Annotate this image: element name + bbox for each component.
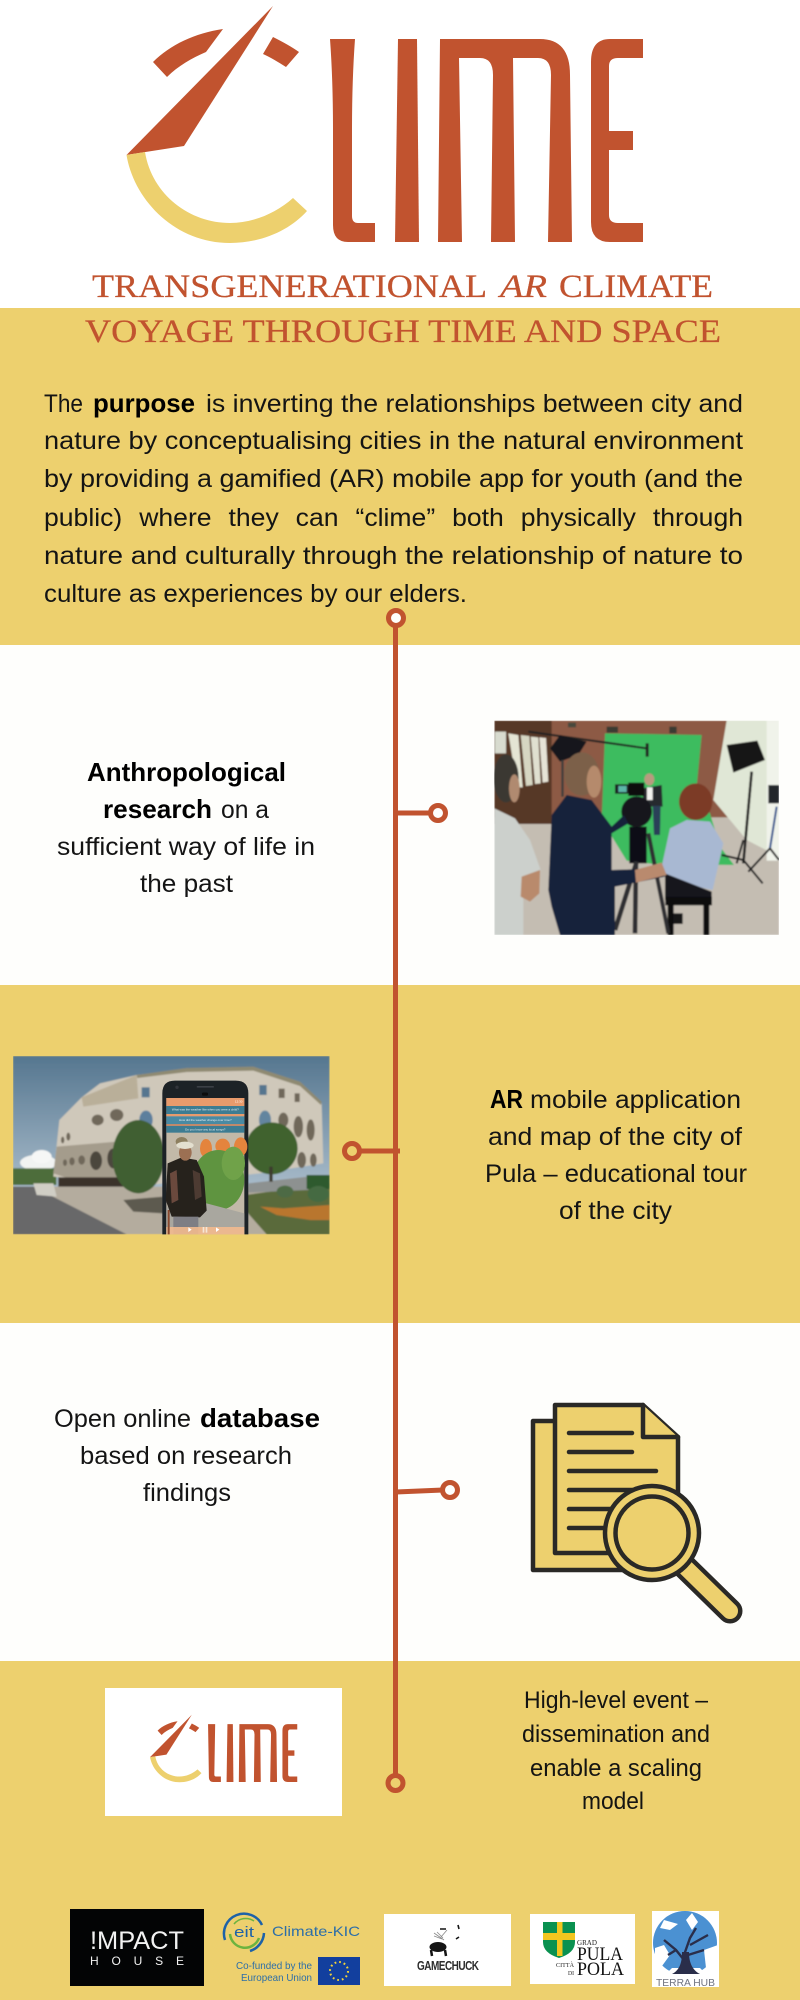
text block: open online database: based on research bbox=[80, 1442, 292, 1470]
text block: anthropological research: on a bbox=[221, 796, 269, 824]
logo: EIT Climate-KIC, co-funded by the EU: Climate-KIC bbox=[272, 1923, 360, 1939]
text block: high-level event: dissemination and bbox=[522, 1721, 710, 1748]
logo: CLIME bbox=[126, 6, 643, 243]
photo: green-screen film set bbox=[493, 721, 779, 935]
text block: open online database: database bbox=[200, 1403, 320, 1433]
text block: high-level event: enable a scaling bbox=[530, 1755, 702, 1782]
logo: Grad Pula / Città di Pola: DI bbox=[568, 1970, 574, 1977]
text block: purpose: public) where they can “clime” both physically through bbox=[44, 504, 743, 532]
panel: purpose band bbox=[0, 308, 800, 645]
title: line one: CLIMATE bbox=[559, 269, 713, 305]
text block: open online database: findings bbox=[143, 1479, 231, 1507]
text block: AR mobile application bbox=[485, 1084, 747, 1225]
logo: EIT Climate-KIC, co-funded by the EU: eit bbox=[234, 1924, 255, 1941]
logo: Grad Pula / Città di Pola: PULA bbox=[577, 1944, 623, 1965]
timeline: vertical line with branches and nodes bbox=[344, 610, 458, 1790]
logo: Terra Hub bbox=[652, 1911, 719, 1989]
logo: Impact House bbox=[70, 1909, 204, 1986]
text block: AR mobile application: of the city bbox=[559, 1197, 673, 1225]
text block: purpose: nature by conceptualising cities in the natural environment bbox=[44, 427, 743, 455]
title: line one: TRANSGENERATIONAL bbox=[92, 269, 487, 305]
title: line one bbox=[92, 269, 713, 305]
title: line one: AR bbox=[498, 269, 547, 305]
text block: anthropological research: research bbox=[103, 794, 212, 824]
logo: small CLIME on white card bbox=[105, 1688, 342, 1816]
text block: anthropological research bbox=[57, 757, 315, 898]
photo: Pula arena with AR phone: 12:30 bbox=[235, 1099, 243, 1103]
panel: row two background bbox=[0, 985, 800, 1323]
text block: anthropological research: sufficient way of life in bbox=[57, 833, 315, 861]
logo: Grad Pula / Città di Pola: CITTÀ bbox=[556, 1961, 574, 1969]
text block: purpose: nature and culturally through the relationship of nature to bbox=[44, 542, 743, 570]
panel: row four background bbox=[0, 1661, 800, 2000]
logo: Gamechuck bbox=[384, 1914, 511, 1986]
panel: row one background bbox=[0, 645, 800, 985]
text block: purpose: is inverting the relationships between city and bbox=[206, 390, 743, 418]
text block: purpose bbox=[44, 388, 743, 608]
text block: high-level event bbox=[522, 1687, 710, 1815]
logo: Gamechuck: GAMECHUCK bbox=[417, 1960, 480, 1973]
panel: header background bbox=[0, 0, 800, 308]
text block: purpose: The bbox=[44, 390, 83, 418]
logo: Grad Pula / Città di Pola: POLA bbox=[577, 1959, 624, 1980]
logo: EIT Climate-KIC, co-funded by the EU: European Union bbox=[241, 1972, 312, 1984]
text block: open online database: Open online bbox=[54, 1405, 191, 1433]
logo: Grad Pula / Città di Pola: GRAD bbox=[577, 1939, 597, 1947]
text block: AR mobile application: AR bbox=[490, 1084, 523, 1114]
logo: Impact House: !MPACT bbox=[90, 1927, 184, 1955]
text block: anthropological research: Anthropological bbox=[87, 757, 286, 787]
text block: purpose: purpose bbox=[93, 388, 195, 418]
text block: purpose: by providing a gamified (AR) mobile app for youth (and the bbox=[44, 465, 743, 493]
logo: Terra Hub: TERRA HUB bbox=[656, 1978, 715, 1989]
photo: Pula arena with AR phone bbox=[13, 1056, 330, 1237]
photo: Pula arena with AR phone: How did the weather change over time? bbox=[179, 1118, 232, 1122]
logo: Grad Pula / Città di Pola bbox=[530, 1914, 635, 1984]
photo: Pula arena with AR phone: Do you know any local songs? bbox=[185, 1127, 226, 1131]
panel: row three background bbox=[0, 1323, 800, 1661]
text block: high-level event: model bbox=[582, 1788, 644, 1815]
logo: EIT Climate-KIC, co-funded by the EU: Co-funded by the bbox=[236, 1960, 312, 1972]
text block: AR mobile application: and map of the city of bbox=[488, 1123, 742, 1151]
text block: AR mobile application: Pula – educational tour bbox=[485, 1160, 747, 1188]
text block: AR mobile application: mobile application bbox=[530, 1086, 741, 1114]
text block: purpose: culture as experiences by our elders. bbox=[44, 580, 467, 608]
text block: anthropological research: the past bbox=[140, 870, 233, 898]
title: line two: VOYAGE THROUGH TIME AND SPACE bbox=[85, 314, 721, 350]
photo: Pula arena with AR phone: What was the weather like when you were a child? bbox=[172, 1108, 239, 1112]
icon: documents with magnifying glass bbox=[533, 1405, 730, 1611]
text block: high-level event: High-level event – bbox=[524, 1687, 709, 1714]
text block: open online database bbox=[54, 1403, 320, 1507]
logo: EIT Climate-KIC, co-funded by the EU bbox=[224, 1914, 360, 1985]
logo: Impact House: HOUSE bbox=[90, 1954, 184, 1968]
